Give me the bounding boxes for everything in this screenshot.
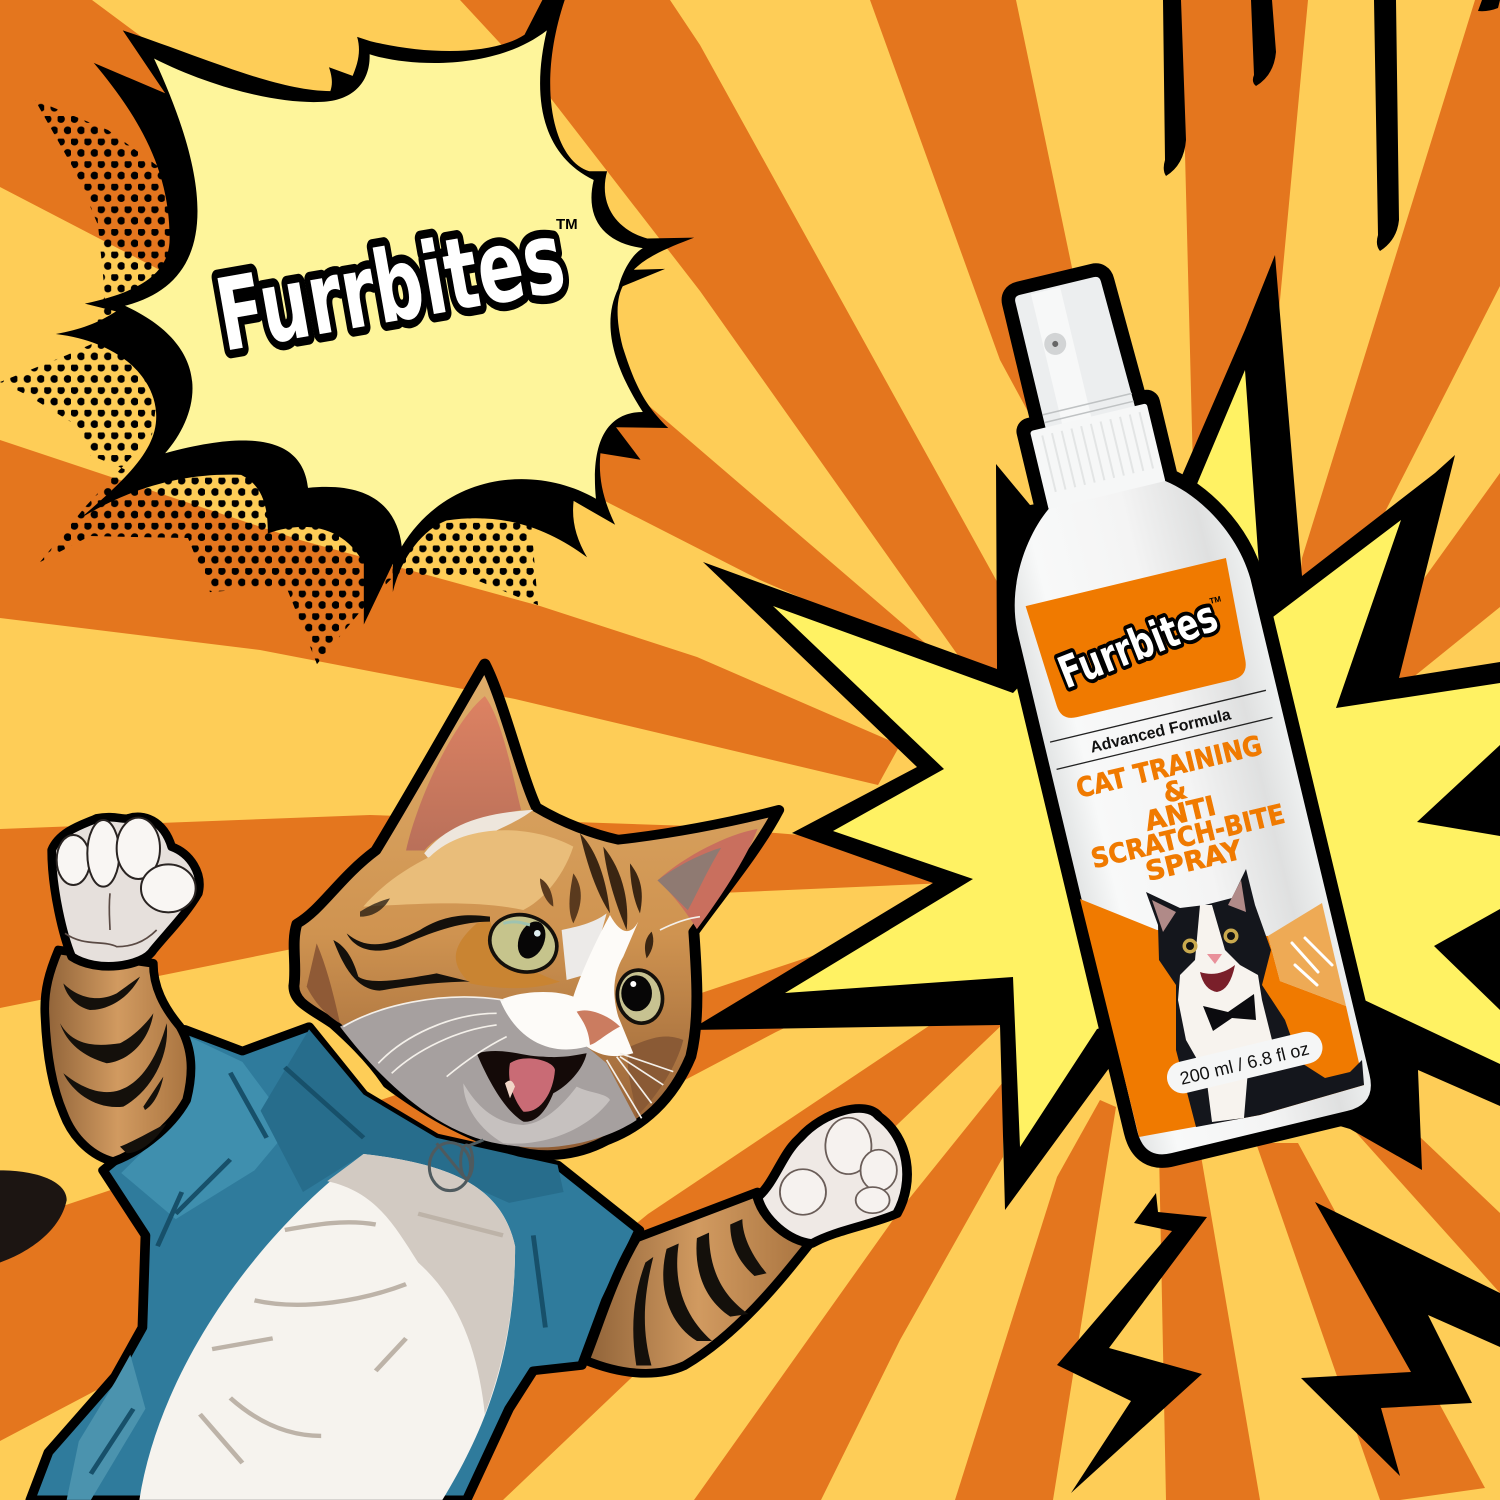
product name: ANTI	[1142, 791, 1219, 838]
ears	[406, 696, 758, 929]
rules	[1050, 690, 1272, 769]
cat head	[294, 664, 779, 1191]
big tabby cat in blue shirt	[0, 664, 907, 1500]
bottle outline	[941, 258, 1377, 1160]
spray bottle	[886, 248, 1425, 1201]
light wedge with claw marks	[1268, 903, 1346, 1006]
bottle trademark: TM	[1209, 594, 1222, 606]
bottle body	[991, 467, 1377, 1160]
product name: SPRAY	[1143, 835, 1246, 888]
ribbed collar	[1030, 403, 1166, 511]
lower panel drawn in page coordinates	[1080, 869, 1364, 1137]
halftone speech bubble with logo	[0, 0, 694, 664]
orange lower panel	[1080, 899, 1364, 1137]
open mouth	[477, 1051, 587, 1122]
cat nose	[577, 1010, 620, 1045]
nozzle	[1014, 275, 1136, 432]
product name: CAT TRAINING	[1073, 730, 1265, 805]
comic burst behind bottle	[690, 255, 1500, 1210]
whiskers	[343, 917, 700, 1118]
lightning bolt right	[1301, 1202, 1500, 1476]
product name: &	[1160, 774, 1190, 810]
volume text: 200 ml / 6.8 fl oz	[1178, 1038, 1311, 1089]
facial markings	[307, 830, 700, 1191]
right arm and fist	[585, 1108, 907, 1373]
product name	[1071, 729, 1294, 900]
advanced formula: Advanced Formula	[1089, 706, 1233, 757]
volume pill	[1164, 1028, 1326, 1097]
orange logo panel	[1026, 558, 1254, 723]
lightning bolt left	[1057, 1193, 1207, 1493]
left arm and fist	[45, 817, 199, 1162]
top ink drips	[1163, 0, 1500, 251]
dark paw at left edge	[0, 1170, 67, 1262]
blue shirt and belly	[30, 1027, 639, 1500]
bottle logo: Furrbites	[1051, 591, 1225, 699]
logo: Furrbites: Furrbites	[208, 199, 573, 375]
cat eyes	[482, 906, 667, 1027]
trademark: TM	[556, 216, 578, 233]
tuxedo cat	[1146, 869, 1364, 1127]
product name: SCRATCH-BITE	[1088, 799, 1288, 875]
collar ring	[429, 1140, 483, 1191]
